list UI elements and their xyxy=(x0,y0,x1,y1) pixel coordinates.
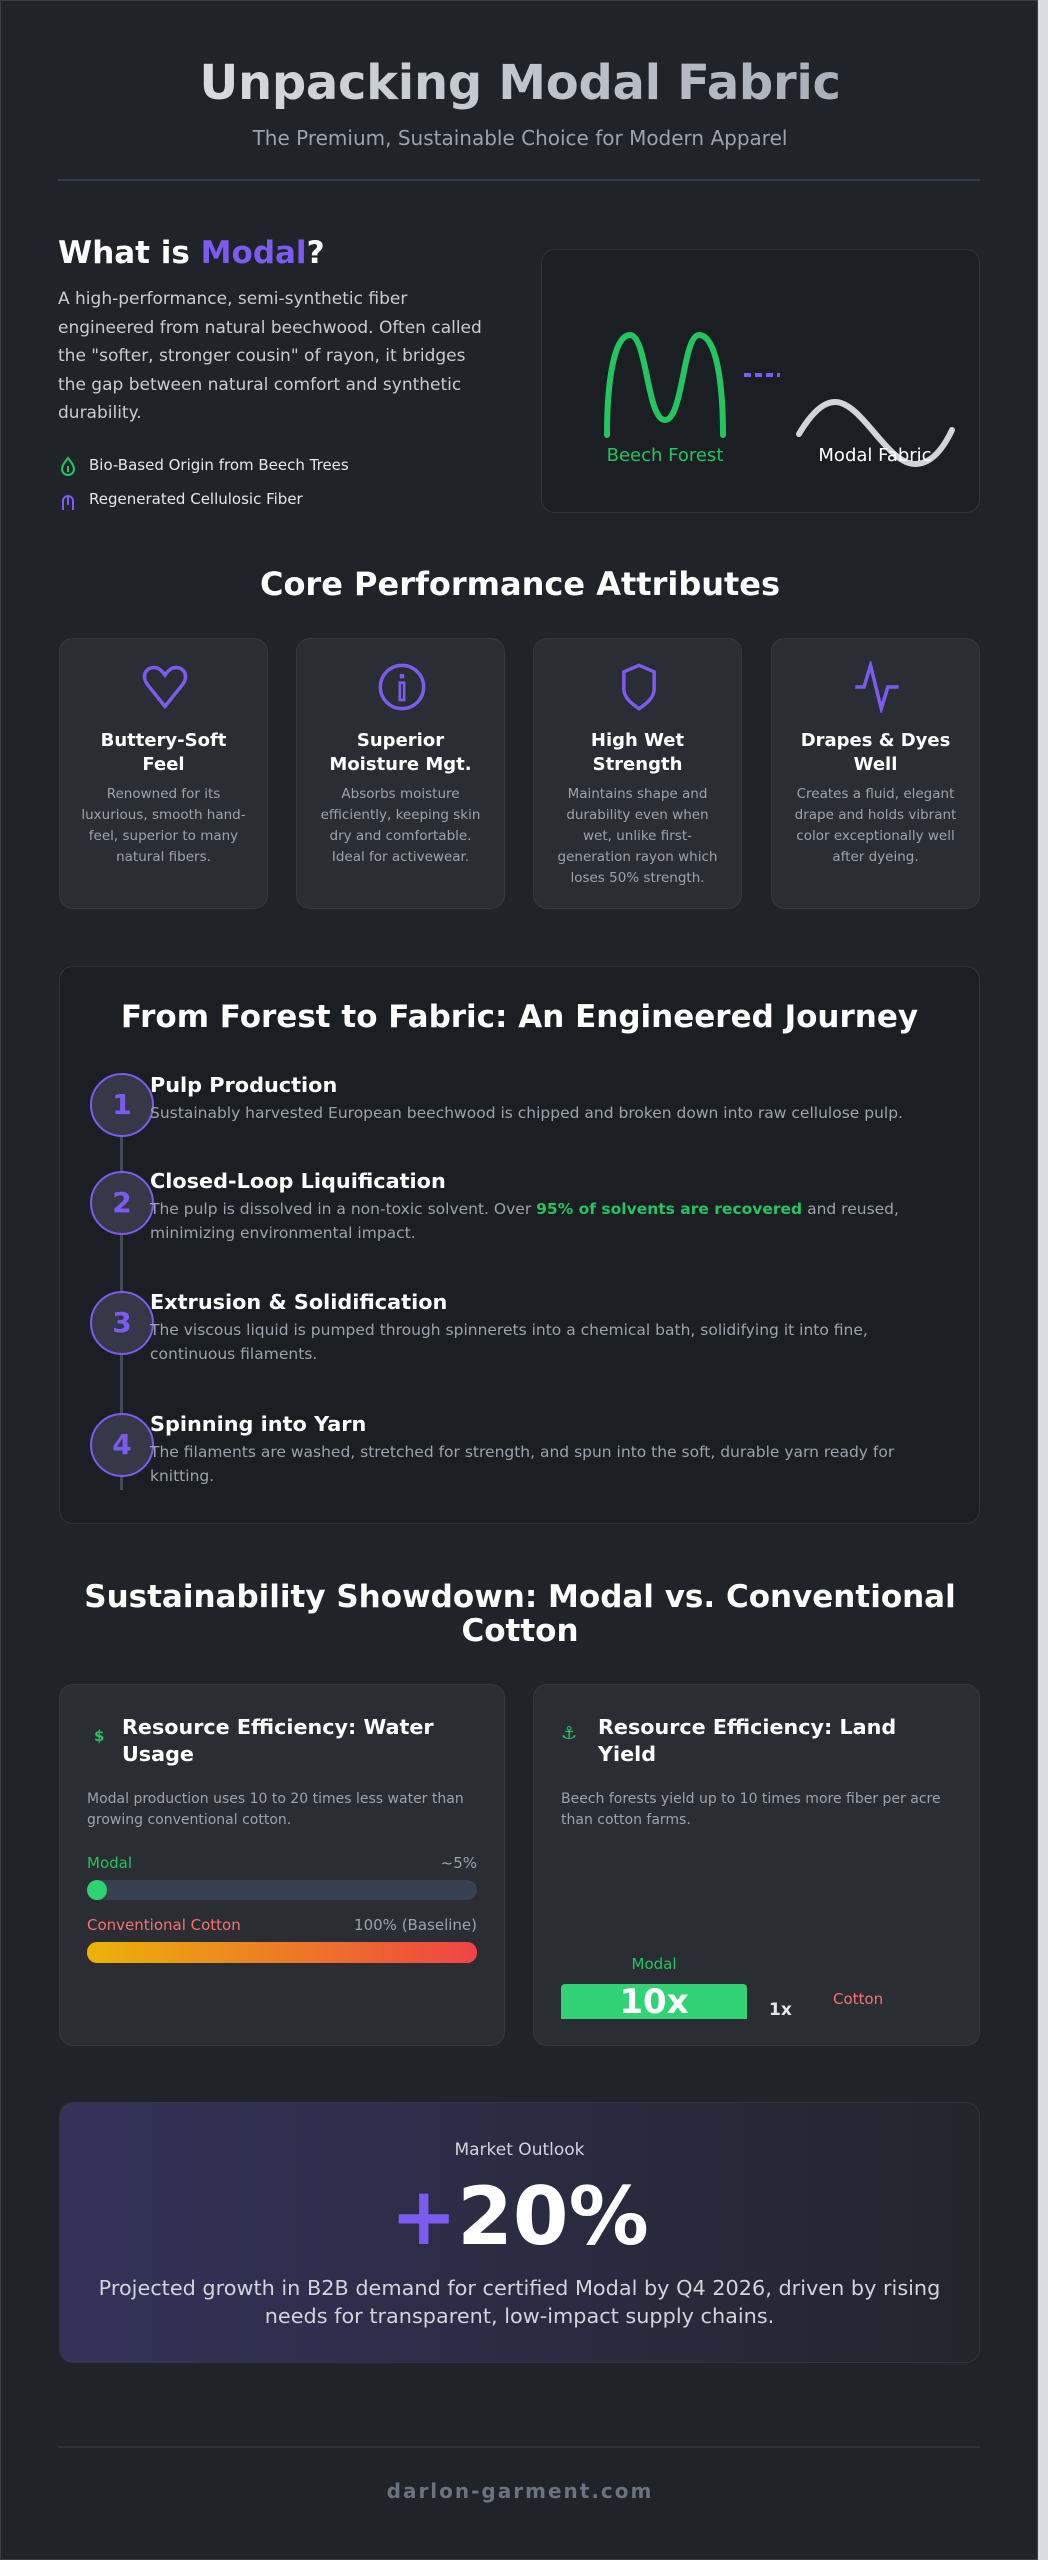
card: moisture xyxy=(296,638,505,909)
text: desc: Projected growth in B2B demand for certified Modal by Q4 2026, driven by rising needs for transparent, low-impact supply chains. xyxy=(99,2276,940,2328)
bar chart: water: ~5% xyxy=(441,1854,477,1872)
bullet: bio-based: Bio-Based Origin from Beech Trees xyxy=(89,456,349,474)
footer: darlon-garment.com xyxy=(387,2479,653,2503)
step 3: The viscous liquid is pumped through spinnerets into a chemical bath, solidifying it into fine, continuous filaments. xyxy=(150,1321,868,1363)
bar chart: land: Modal xyxy=(632,1955,676,1973)
bar chart: land xyxy=(561,1955,883,2022)
icon: beech forest wave xyxy=(607,335,723,435)
subtitle: The Premium, Sustainable Choice for Modern Apparel xyxy=(253,126,787,150)
title: Unpacking Modal Fabric xyxy=(199,55,841,111)
step 4: The filaments are washed, stretched for strength, and spun into the soft, durable yarn ready for knitting. xyxy=(150,1443,894,1485)
text: label: Market Outlook xyxy=(454,2140,585,2160)
card: buttery-soft xyxy=(59,638,268,909)
icon: number 4: 4 xyxy=(112,1428,132,1461)
card: drapes xyxy=(771,638,980,909)
icon: heart xyxy=(142,666,188,710)
text: heading: Resource Efficiency: Land Yield xyxy=(598,1715,896,1766)
bar chart: water: Conventional Cotton xyxy=(87,1916,241,1934)
text: title xyxy=(101,730,226,775)
text: desc: Creates a fluid, elegant drape and holds vibrant color exceptionally well after dyeing. xyxy=(795,786,956,865)
icon: number 1: 1 xyxy=(112,1088,132,1121)
text: desc: Beech forests yield up to 10 times more fiber per acre than cotton farms. xyxy=(561,1791,941,1828)
step 2: Closed-Loop Liquification xyxy=(150,1169,446,1193)
heading: journey: From Forest to Fabric: An Engineered Journey xyxy=(121,999,918,1035)
label: modal fabric: Modal Fabric xyxy=(818,445,932,466)
icon: number 4 xyxy=(90,1413,154,1477)
heading: What is Modal: What is Modal? xyxy=(58,235,325,271)
text: title xyxy=(591,730,684,775)
text: title xyxy=(329,730,472,775)
card: water usage xyxy=(59,1684,505,2046)
bar chart: water xyxy=(87,1854,477,1963)
icon: number 2: 2 xyxy=(112,1186,132,1219)
bullet list xyxy=(61,456,349,510)
step 3: Extrusion & Solidification xyxy=(150,1290,447,1314)
icon: shield xyxy=(622,664,656,711)
text: title xyxy=(801,730,950,775)
step 1: Pulp Production xyxy=(150,1073,337,1097)
icon: number 3: 3 xyxy=(112,1306,132,1339)
text: desc: Renowned for its luxurious, smooth hand-feel, superior to many natural fibers. xyxy=(81,786,246,865)
arrow: dashed connector xyxy=(744,373,780,377)
step 1 xyxy=(90,1073,903,1137)
step 1: Sustainably harvested European beechwood is chipped and broken down into raw cellulose pulp. xyxy=(150,1104,903,1122)
heading: core attributes: Core Performance Attributes xyxy=(260,565,780,603)
title xyxy=(1,53,1039,113)
intro paragraph: A high-performance, semi-synthetic fiber engineered from natural beechwood. Often called the "softer, stronger cousin" of rayon, it bridges the gap between natural comfort and synthetic durability. xyxy=(58,289,482,423)
icon: leaf xyxy=(61,456,75,476)
text: big stat: +20% xyxy=(390,2170,649,2263)
bar chart: land: Cotton xyxy=(833,1990,883,2008)
text: desc: Absorbs moisture efficiently, keeping skin dry and comfortable. Ideal for activewear. xyxy=(321,786,480,865)
text: title: Buttery-Soft xyxy=(101,730,226,751)
bar chart: land: 10x xyxy=(619,1982,689,2022)
text: desc: Maintains shape and durability even when wet, unlike first-generation rayon which loses 50% strength. xyxy=(558,786,717,886)
step 4: Spinning into Yarn xyxy=(150,1412,366,1436)
text: title: High Wet xyxy=(591,730,684,751)
icon: info circle xyxy=(378,664,426,710)
text: desc: Modal production uses 10 to 20 times less water than growing conventional cotton. xyxy=(87,1791,464,1828)
icon: pulse xyxy=(855,661,899,713)
text: title: Strength xyxy=(593,754,682,775)
icon: number 1 xyxy=(90,1073,154,1137)
icon: fiber xyxy=(62,495,74,510)
bar chart: water: 100% (Baseline) xyxy=(354,1916,477,1934)
bar chart: land: 1x xyxy=(769,2000,792,2020)
text: title: Well xyxy=(854,754,897,775)
label: beech forest: Beech Forest xyxy=(607,445,723,466)
icon: number 3 xyxy=(90,1291,154,1355)
icon: modal fabric wave xyxy=(799,402,952,464)
icon: anchor: ⚓ xyxy=(561,1723,577,1744)
card: wet strength xyxy=(533,638,742,909)
text: title: Feel xyxy=(142,754,185,775)
heading: sustainability: Sustainability Showdown: Modal vs. Conventional Cotton xyxy=(84,1579,956,1649)
step 4 xyxy=(90,1412,894,1485)
step 3 xyxy=(90,1290,868,1363)
text: title: Moisture Mgt. xyxy=(329,754,472,775)
step 2 xyxy=(90,1169,899,1242)
card: land yield xyxy=(533,1684,980,2046)
panel: forest to fabric illustration xyxy=(541,249,980,513)
step 2: The pulp is dissolved in a non-toxic solvent. Over 95% of solvents are recovered and reused, minimizing environmental impact. xyxy=(150,1200,899,1242)
icon: number 2 xyxy=(90,1171,154,1235)
panel: journey xyxy=(59,966,980,1524)
text: title: Superior xyxy=(357,730,444,751)
callout: market outlook xyxy=(59,2102,980,2363)
text: heading: Resource Efficiency: Water Usage xyxy=(122,1715,434,1766)
text: title: Drapes & Dyes xyxy=(801,730,950,751)
icon: dollar: $ xyxy=(94,1727,104,1745)
bar chart: water: Modal xyxy=(87,1854,132,1872)
bullet: regenerated: Regenerated Cellulosic Fiber xyxy=(89,490,303,508)
